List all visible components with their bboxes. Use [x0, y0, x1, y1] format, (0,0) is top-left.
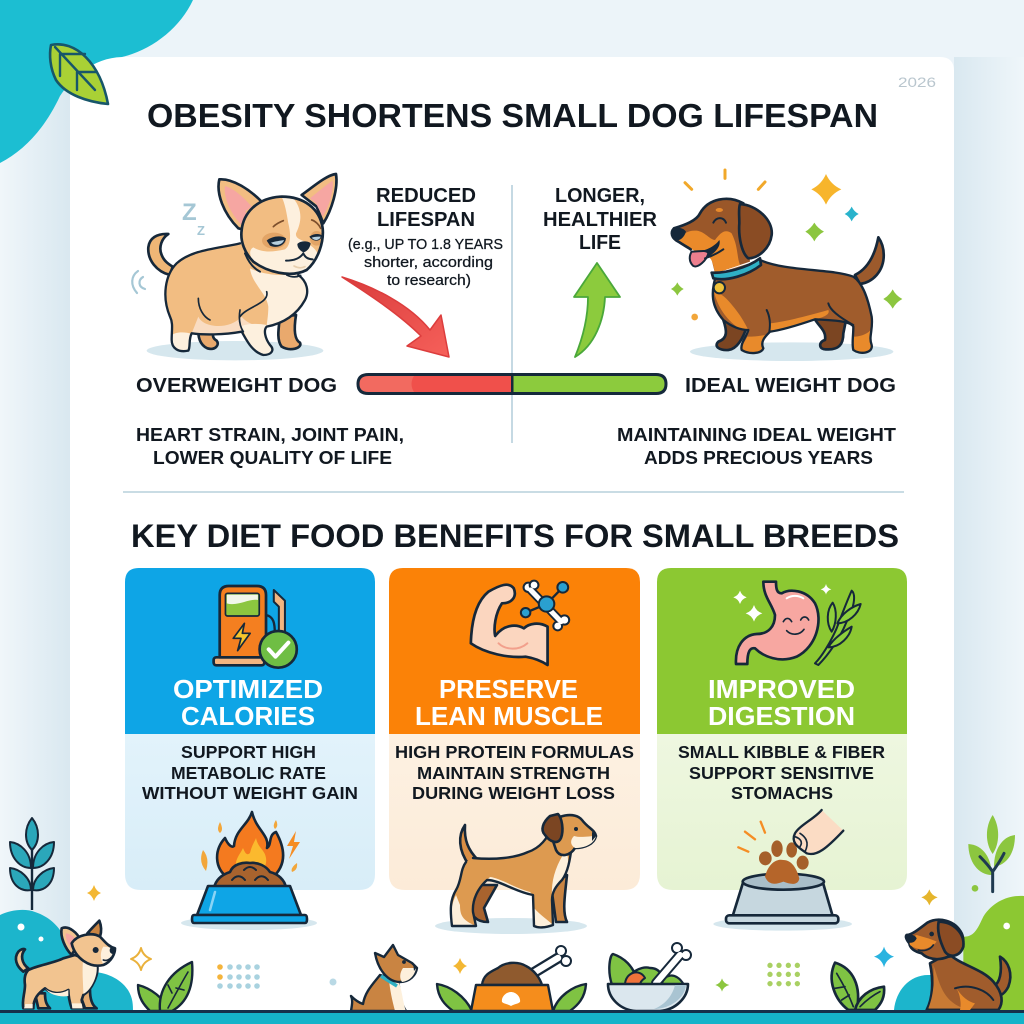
icon: sleeping Z letters: Z — [182, 199, 197, 226]
motion marks near tail — [132, 271, 145, 293]
section heading: KEY DIET FOOD BENEFITS FOR SMALL BREEDS — [131, 518, 899, 554]
card title: IMPROVED — [708, 674, 855, 704]
lifespan progress bar — [358, 374, 666, 394]
card title: OPTIMIZED — [173, 674, 323, 704]
icon: green leaf top-left — [50, 44, 108, 104]
year label: 2026 — [898, 74, 936, 90]
reduced lifespan text: LIFESPAN — [377, 209, 475, 231]
card description: HIGH PROTEIN FORMULAS — [395, 742, 634, 762]
label: overweight dog: OVERWEIGHT DOG — [136, 375, 337, 397]
reduced lifespan text — [348, 185, 503, 289]
label: ideal weight dog: IDEAL WEIGHT DOG — [685, 375, 896, 397]
icon: flame over food bowl — [181, 812, 317, 930]
text: ideal weight benefit — [617, 424, 897, 468]
illustration: small sitting puppy — [351, 945, 417, 1011]
card description: STOMACHS — [731, 783, 833, 803]
dog head — [219, 174, 336, 277]
arrow: red downward — [342, 277, 449, 357]
decorative teal blob top-left — [0, 0, 193, 163]
panel: preserve lean muscle — [389, 568, 640, 890]
reduced lifespan text: to research) — [387, 273, 471, 289]
text: ideal weight benefit: MAINTAINING IDEAL WEIGHT — [617, 424, 897, 445]
reduced lifespan text: REDUCED — [376, 185, 476, 207]
title: OBESITY SHORTENS SMALL DOG LIFESPAN — [147, 97, 878, 134]
illustration: ideal weight dachshund — [671, 170, 902, 361]
illustration: sitting dachshund right — [906, 920, 1010, 1010]
card title — [173, 674, 323, 731]
card description: SMALL KIBBLE & FIBER — [678, 742, 885, 762]
vertical divider — [511, 185, 513, 443]
card description — [395, 742, 634, 803]
card description: SUPPORT SENSITIVE — [689, 763, 874, 783]
card title: PRESERVE — [439, 674, 578, 704]
card title: DIGESTION — [708, 701, 855, 731]
plant: left teal sprig — [10, 818, 54, 910]
icon: sleeping Z letters: Z — [197, 223, 205, 238]
text: overweight consequences: LOWER QUALITY OF LIFE — [153, 447, 392, 468]
card description: DURING WEIGHT LOSS — [412, 783, 615, 803]
text: overweight consequences — [136, 424, 404, 468]
reduced lifespan text: (e.g., UP TO 1.8 YEARS — [348, 237, 503, 253]
plant: teal hills bottom-left — [0, 910, 133, 1012]
illustration: small chihuahua left — [16, 921, 116, 1008]
icon: sleeping Z letters — [182, 199, 205, 238]
card description: WITHOUT WEIGHT GAIN — [142, 783, 358, 803]
longer healthier life text: LONGER, — [555, 185, 645, 207]
plant: green leaves right — [832, 963, 884, 1010]
panel: optimized calories — [125, 568, 375, 890]
card description — [678, 742, 885, 803]
sparkles and dots left — [18, 885, 336, 986]
card description: SUPPORT HIGH — [181, 742, 316, 762]
longer healthier life text: LIFE — [579, 232, 621, 254]
reduced lifespan text: shorter, according — [364, 255, 493, 271]
card description: MAINTAIN STRENGTH — [417, 763, 610, 783]
card description: METABOLIC RATE — [171, 763, 326, 783]
card title — [415, 674, 603, 731]
dot grid left — [217, 964, 260, 989]
text: ideal weight benefit: ADDS PRECIOUS YEARS — [644, 447, 873, 468]
card title — [708, 674, 855, 731]
dachshund head and collar — [671, 199, 772, 293]
icon: orange food bowl with bone — [437, 946, 586, 1011]
plant: green leaves left — [138, 962, 192, 1011]
footer band — [0, 1010, 1024, 1024]
longer healthier life text — [543, 185, 658, 254]
card title: CALORIES — [181, 701, 315, 731]
icon: paw treat, hand and bowl — [713, 810, 852, 931]
sparkles and dots right — [715, 889, 938, 992]
panel: improved digestion — [657, 568, 907, 890]
illustration: overweight dog — [147, 174, 336, 360]
icon: happy stomach with herb — [733, 582, 861, 665]
plant: green sprig right — [968, 815, 1015, 892]
icon: salad bowl with bone — [608, 943, 691, 1011]
longer healthier life text: HEALTHIER — [543, 209, 658, 231]
icon: sparkle near food bowl — [453, 958, 467, 974]
icon: flexed arm with molecule — [471, 581, 569, 665]
plant: green and teal hills bottom-right — [894, 896, 1024, 1010]
card title: LEAN MUSCLE — [415, 701, 603, 731]
arrow: green upward — [574, 263, 620, 357]
card description — [142, 742, 358, 803]
text: overweight consequences: HEART STRAIN, JOINT PAIN, — [136, 424, 404, 445]
illustration: lean standing dog — [435, 814, 597, 934]
icon: fuel pump with check — [214, 586, 297, 668]
